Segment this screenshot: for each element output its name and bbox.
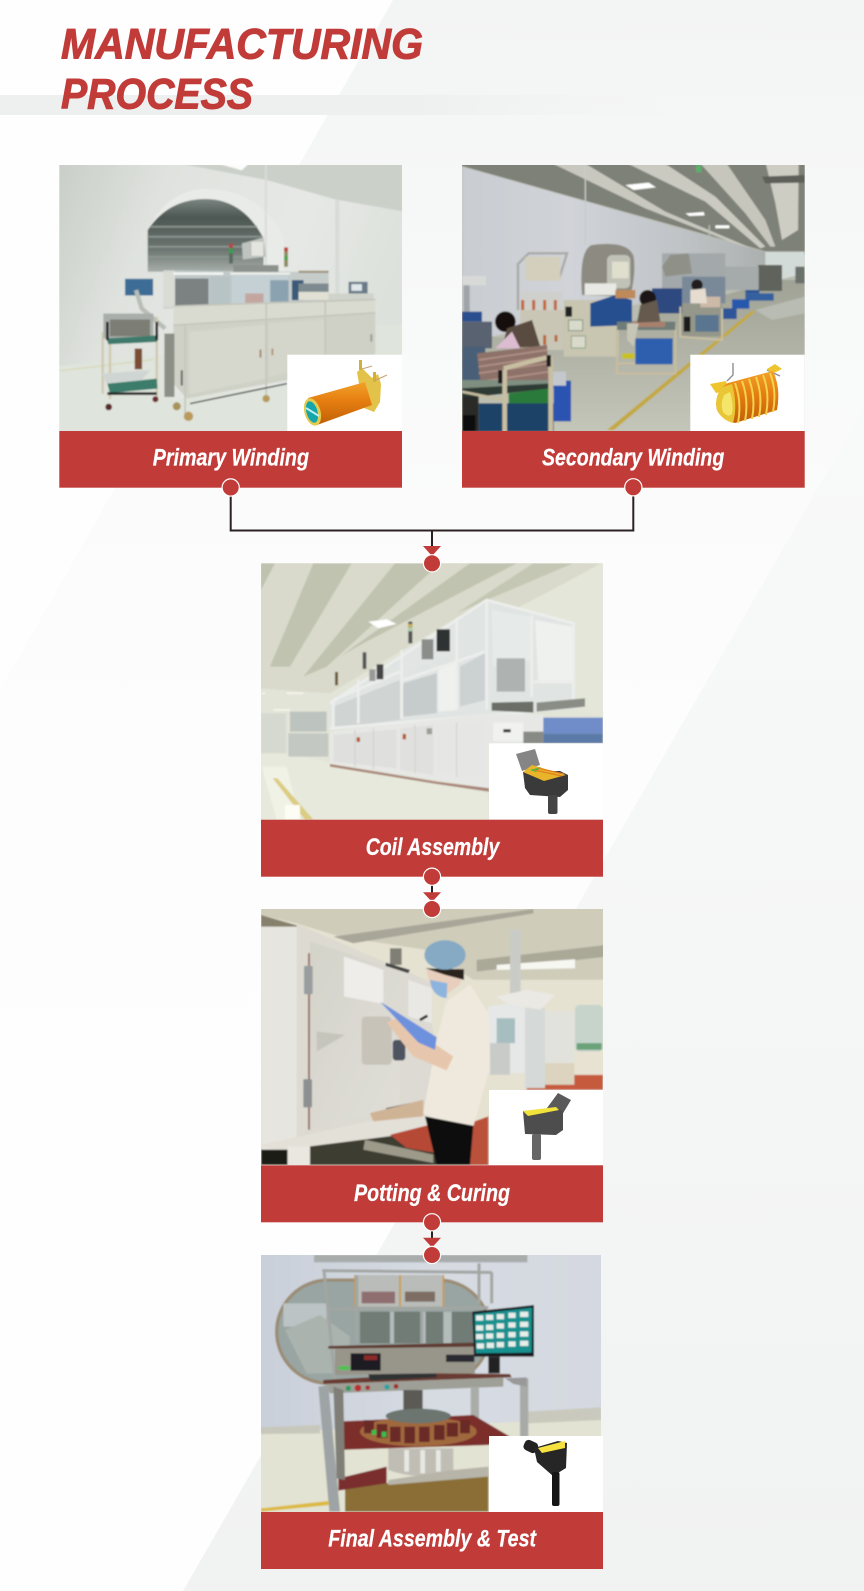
connector node xyxy=(625,479,642,496)
title: PROCESS xyxy=(61,70,253,118)
connector node: top of coil assembly xyxy=(423,555,441,572)
connector: primary and secondary winding join into coil assembly xyxy=(231,496,633,556)
panel: final assembly and test xyxy=(258,1246,604,1569)
photo: secondary winding line xyxy=(462,165,805,431)
caption bar: secondary winding xyxy=(462,431,805,488)
caption bar: final assembly and test xyxy=(261,1512,603,1569)
panel: coil assembly xyxy=(258,560,606,902)
caption bar: coil assembly xyxy=(261,820,603,877)
inset: coil assembly render xyxy=(489,743,603,820)
connector node: top of potting and curing xyxy=(423,900,441,918)
photo: final test machine xyxy=(261,1255,601,1512)
title xyxy=(61,20,423,118)
photo: potting oven and operator xyxy=(261,909,603,1165)
caption: coil assembly: Coil Assembly xyxy=(366,834,501,861)
caption bar: primary winding xyxy=(59,431,402,488)
caption bar: potting and curing xyxy=(261,1165,603,1222)
inset: potted coil render xyxy=(489,1090,603,1165)
caption: secondary winding: Secondary Winding xyxy=(542,445,725,472)
inset: primary coil render xyxy=(287,355,402,431)
connector node xyxy=(222,479,239,496)
photo: coil assembly line xyxy=(261,563,603,820)
caption: primary winding: Primary Winding xyxy=(153,445,309,472)
panel: secondary winding xyxy=(459,162,808,496)
panel: primary winding xyxy=(57,162,405,496)
connector node xyxy=(423,1246,441,1264)
inset: secondary coil render xyxy=(690,355,805,431)
connector nodes: potting to final assembly xyxy=(423,1214,441,1248)
caption: potting and curing: Potting & Curing xyxy=(354,1180,510,1207)
panel: potting and curing xyxy=(258,906,606,1248)
connector nodes: coil assembly to potting xyxy=(423,868,441,902)
title: MANUFACTURING xyxy=(61,20,423,68)
inset: finished ignition coil render xyxy=(489,1436,603,1512)
photo: primary winding machine xyxy=(59,165,402,431)
caption: final assembly and test: Final Assembly & Test xyxy=(328,1526,537,1553)
